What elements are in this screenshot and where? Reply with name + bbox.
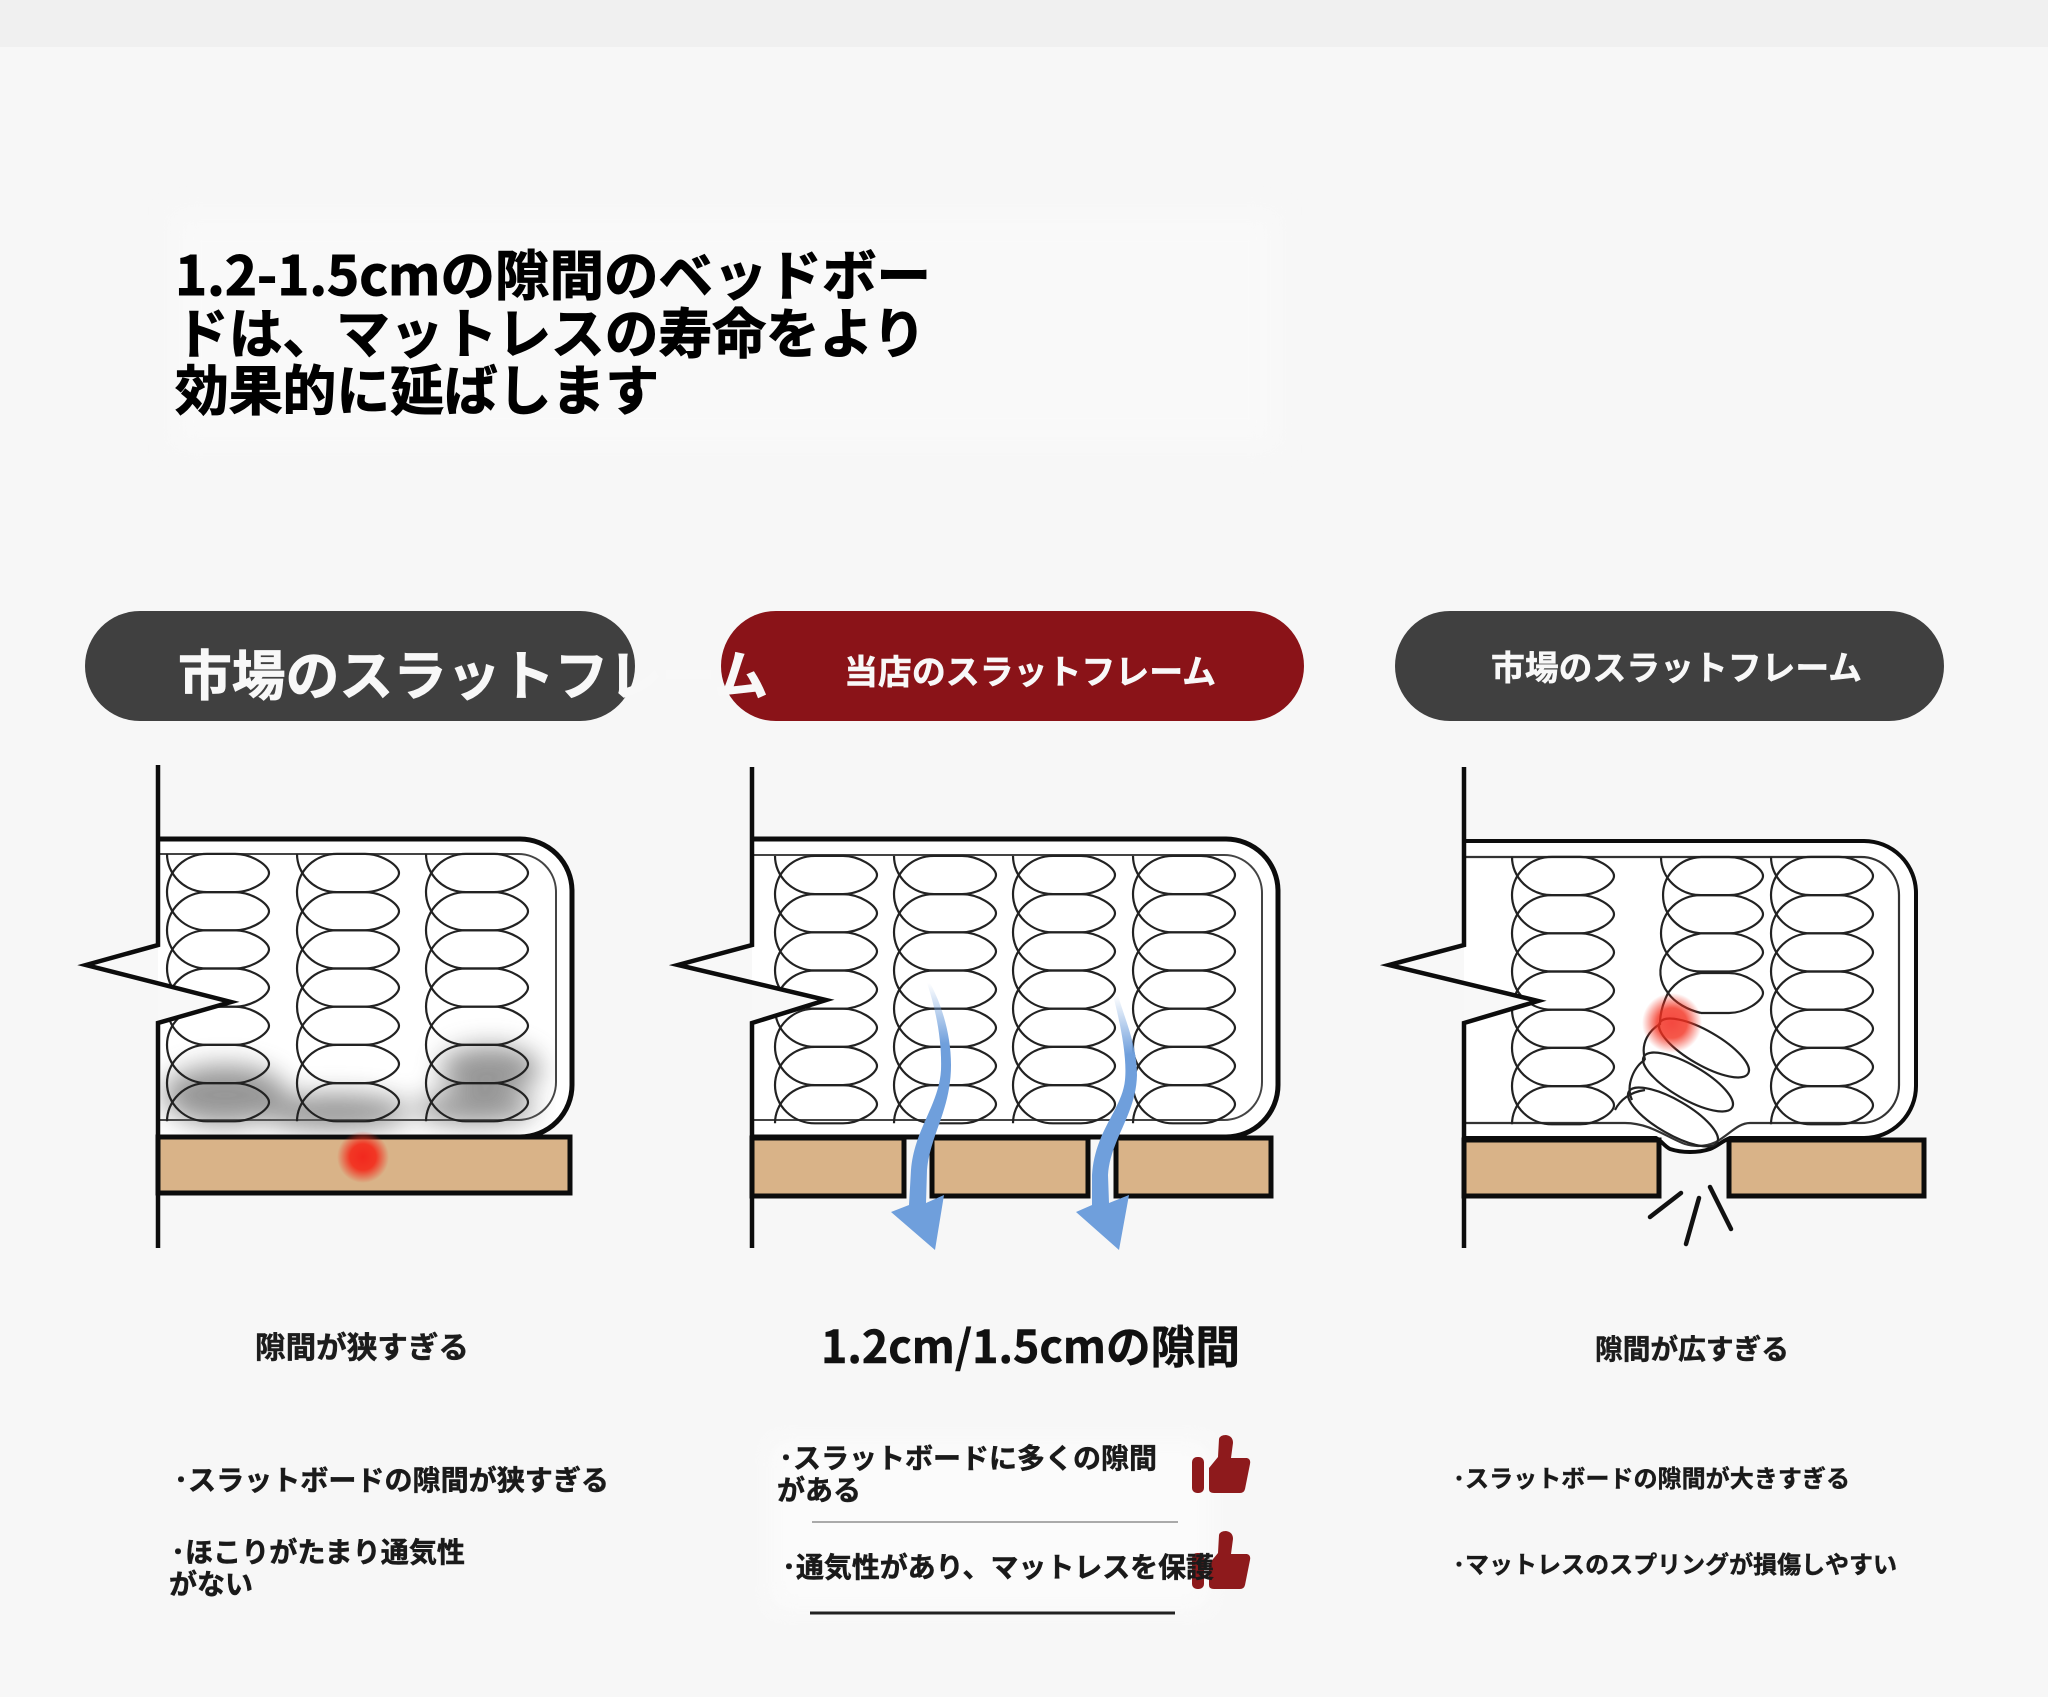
title: 1.2-1.5cmの隙間のベッドボー [175, 232, 931, 311]
pill: market slat frame right [1395, 611, 1944, 721]
dust shadow [163, 1046, 540, 1130]
diagram: 1.2/1.5cm gap [678, 767, 1278, 1250]
pill: our slat frame [721, 611, 1304, 721]
bullets: center: ･スラットボードに多くの隙間 [779, 1437, 1157, 1477]
bullets: left: がない [169, 1563, 253, 1603]
title: 効果的に延ばします [175, 347, 659, 426]
bullets: left [169, 1459, 609, 1603]
bullets: right [1453, 1459, 1897, 1580]
bullets: left: ･スラットボードの隙間が狭すぎる [174, 1459, 609, 1499]
top band [0, 0, 2048, 47]
soft highlight behind center bullets [770, 1440, 1210, 1610]
bullets: left: ･ほこりがたまり通気性 [171, 1531, 465, 1571]
diagram: gap too narrow [86, 765, 572, 1248]
bullets: center: ･通気性があり、マットレスを保護 [782, 1546, 1214, 1586]
airflow arrow 1 [891, 983, 951, 1250]
bullets: right: ･スラットボードの隙間が大きすぎる [1453, 1459, 1850, 1494]
pill label: right: 市場のスラットフレーム [1491, 641, 1862, 690]
pressure spot [337, 1131, 389, 1183]
icon: thumbs up 1 [1192, 1435, 1250, 1493]
title: ドは、マットレスの寿命をより [175, 290, 926, 369]
pill: market slat frame left [85, 611, 635, 721]
soft highlight behind title [175, 215, 1275, 445]
pill label: center: 当店のスラットフレーム [844, 645, 1216, 694]
impact marks [1650, 1187, 1731, 1244]
bullets: center: がある [777, 1469, 861, 1509]
stress spot [1642, 993, 1702, 1053]
airflow arrow 2 [1076, 995, 1137, 1250]
broken spring [1615, 857, 1763, 1157]
bullets: right: ･マットレスのスプリングが損傷しやすい [1453, 1545, 1897, 1580]
title [175, 232, 931, 426]
pill label: left: 市場のスラットフレーム [178, 632, 768, 711]
diagram: gap too wide [1389, 767, 1924, 1248]
bullets: center [777, 1437, 1214, 1586]
icon: thumbs up 2 [1192, 1531, 1250, 1589]
caption: 1.2/1.5cm gap: 1.2cm/1.5cmの隙間 [821, 1311, 1240, 1376]
caption: gap too narrow: 隙間が狭すぎる [255, 1323, 469, 1367]
caption: gap too wide: 隙間が広すぎる [1595, 1328, 1789, 1368]
